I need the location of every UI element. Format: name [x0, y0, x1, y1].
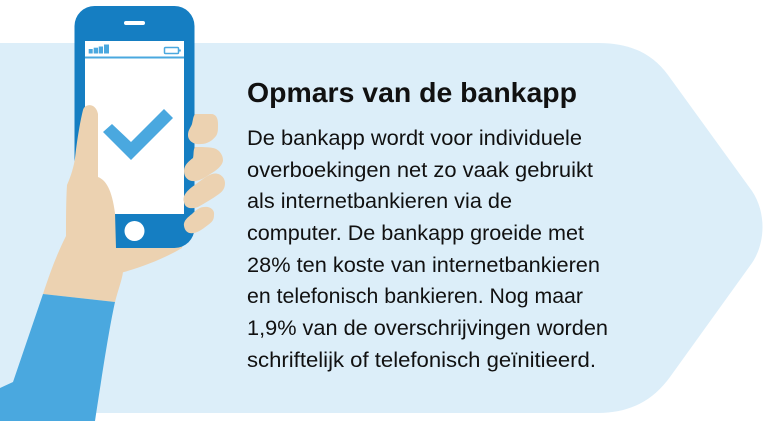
body text: computer. De bankapp groeide met — [247, 221, 584, 245]
body text: 28% ten koste van internetbankieren — [247, 253, 600, 277]
body text: De bankapp wordt voor individuele — [247, 126, 582, 150]
body text: schriftelijk of telefonisch geïnitieerd. — [247, 348, 596, 372]
finger 2 — [184, 147, 223, 181]
status bar divider — [85, 56, 184, 58]
finger 3 — [184, 174, 225, 208]
body text: als internetbankieren via de — [247, 189, 512, 213]
signal bars — [89, 44, 109, 54]
body text: 1,9% van de overschrijvingen worden — [247, 316, 608, 340]
palm behind phone — [100, 240, 182, 280]
body text — [247, 126, 608, 372]
illustration: hand holding phone — [0, 6, 225, 421]
home button — [124, 221, 144, 241]
phone body — [74, 6, 194, 248]
sleeve — [0, 294, 115, 421]
body text: overboekingen net zo vaak gebruikt — [247, 158, 593, 182]
phone screen — [85, 41, 184, 214]
speaker — [124, 21, 145, 25]
hand and thumb — [43, 105, 123, 302]
finger 1 — [188, 114, 218, 144]
battery — [164, 48, 181, 54]
heading: Opmars van de bankapp — [247, 77, 577, 108]
check mark — [103, 109, 173, 160]
phone — [74, 6, 194, 248]
finger 4 — [184, 207, 214, 233]
body text: en telefonisch bankieren. Nog maar — [247, 284, 583, 308]
